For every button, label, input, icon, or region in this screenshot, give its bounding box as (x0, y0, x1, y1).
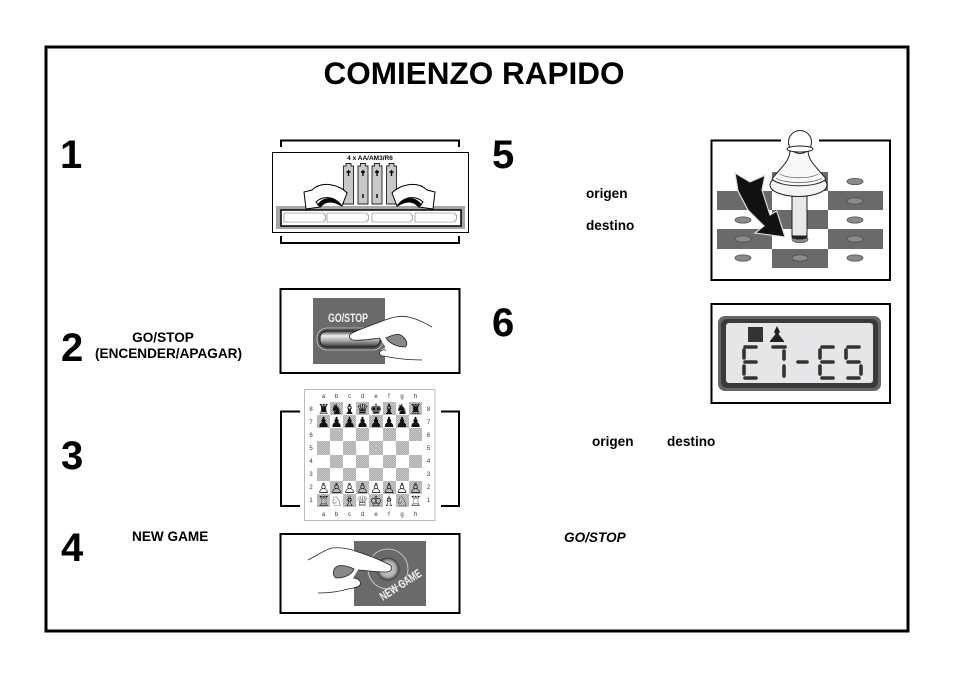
black pieces: ♞ (330, 402, 343, 418)
text: go/stop label: (ENCENDER/APAGAR) (95, 346, 242, 361)
white pieces: ♙ (370, 481, 382, 497)
board coordinates: 2 (309, 485, 313, 491)
step number 1: 1 (60, 133, 82, 177)
battery label: 4 x AA/AM3/R6 (347, 155, 393, 162)
board coordinates: 5 (427, 446, 431, 452)
black pieces (317, 402, 422, 431)
white pieces: ♘ (330, 494, 343, 510)
white pieces: ♘ (396, 494, 408, 510)
white pieces: ♙ (356, 481, 369, 497)
board coordinates: c (348, 394, 351, 400)
white pieces: ♖ (317, 494, 330, 510)
button (368, 549, 408, 589)
black pieces: ♟ (330, 415, 343, 431)
board coordinates: 4 (427, 459, 431, 465)
black pieces: ♟ (317, 415, 330, 431)
white pieces: ♙ (330, 481, 343, 497)
arrow (735, 173, 785, 237)
black pieces: ♟ (370, 415, 382, 431)
battery compartment (276, 206, 465, 229)
black pieces: ♞ (396, 402, 408, 418)
pawn (770, 130, 827, 239)
board coordinates: b (335, 512, 339, 518)
step number 6: 6 (492, 301, 514, 345)
board coordinates: 8 (309, 407, 313, 413)
board coordinates (309, 394, 431, 518)
hand (349, 316, 432, 360)
step number 5: 5 (492, 133, 514, 177)
board coordinates: g (400, 394, 404, 400)
segment display (744, 347, 861, 378)
board coordinates: c (348, 512, 351, 518)
button (317, 328, 383, 350)
black pieces: ♛ (356, 402, 369, 418)
arrow: left (304, 184, 347, 209)
text: destino step 5: destino (586, 218, 634, 233)
illustration: new game button (280, 534, 460, 613)
batteries (344, 164, 396, 204)
hand (308, 548, 392, 593)
board coordinates: 7 (309, 420, 313, 426)
board coordinates: 6 (427, 433, 431, 439)
black pieces: ♟ (383, 415, 395, 431)
illustration: chess board (281, 390, 459, 520)
white pieces: ♗ (343, 494, 356, 510)
board coordinates: d (361, 394, 364, 400)
text: go/stop italic: GO/STOP (564, 530, 627, 545)
title: COMIENZO RAPIDO (323, 55, 625, 91)
board coordinates: f (388, 394, 390, 400)
arrow: right (392, 184, 435, 209)
board coordinates: 8 (427, 407, 431, 413)
black pieces: ♟ (343, 415, 356, 431)
board coordinates: e (374, 512, 378, 518)
illustration: lcd display (712, 304, 890, 403)
black pieces: ♟ (356, 415, 369, 431)
pawn indicator (770, 326, 784, 342)
white pieces: ♙ (396, 481, 408, 497)
board coordinates: b (335, 394, 339, 400)
button label: GO/STOP (328, 313, 368, 325)
black pieces: ♟ (409, 415, 422, 431)
white pieces: ♗ (383, 494, 395, 510)
board squares (317, 402, 422, 507)
board coordinates: e (374, 394, 378, 400)
board holes (735, 178, 863, 261)
text: go/stop label: GO/STOP (132, 330, 194, 345)
illustration: pawn move (712, 130, 890, 280)
board coordinates: f (388, 512, 390, 518)
board coordinates: 3 (427, 472, 431, 478)
step number 2: 2 (61, 326, 83, 370)
black pieces: ♝ (343, 402, 356, 418)
text: origen step 6: origen (592, 434, 634, 449)
text: go/stop label (95, 330, 242, 361)
board coordinates: 4 (309, 459, 313, 465)
board coordinates: 6 (309, 433, 313, 439)
board coordinates: a (322, 394, 326, 400)
step number 4: 4 (61, 526, 84, 570)
white pieces: ♕ (356, 494, 369, 510)
white pieces: ♙ (317, 481, 330, 497)
white pieces: ♔ (370, 494, 382, 510)
white pieces: ♙ (343, 481, 356, 497)
board coordinates: h (414, 394, 417, 400)
board coordinates: g (400, 512, 404, 518)
white pieces: ♖ (409, 494, 422, 510)
illustration: batteries (272, 140, 468, 243)
board coordinates: 1 (309, 498, 313, 504)
black pieces: ♚ (370, 402, 382, 418)
step number 3: 3 (61, 434, 83, 478)
outer frame (46, 47, 908, 631)
black pieces: ♜ (317, 402, 330, 418)
square indicator (748, 327, 763, 342)
board coordinates: d (361, 512, 364, 518)
board squares (717, 172, 883, 268)
text: destino step 6: destino (667, 434, 715, 449)
board coordinates: 7 (427, 420, 431, 426)
white pieces: ♙ (383, 481, 395, 497)
illustration: go/stop button (280, 289, 460, 373)
board coordinates: a (322, 512, 326, 518)
board coordinates: 3 (309, 472, 313, 478)
board coordinates: 5 (309, 446, 313, 452)
board coordinates: 2 (427, 485, 431, 491)
text: new game label: NEW GAME (132, 529, 208, 544)
board coordinates: 1 (427, 498, 431, 504)
text: origen step 5: origen (586, 186, 628, 201)
white pieces (317, 481, 422, 510)
button label: NEW GAME (377, 566, 424, 604)
black pieces: ♜ (409, 402, 422, 418)
black pieces: ♝ (383, 402, 395, 418)
black pieces: ♟ (396, 415, 408, 431)
board coordinates: h (414, 512, 417, 518)
white pieces: ♙ (409, 481, 422, 497)
